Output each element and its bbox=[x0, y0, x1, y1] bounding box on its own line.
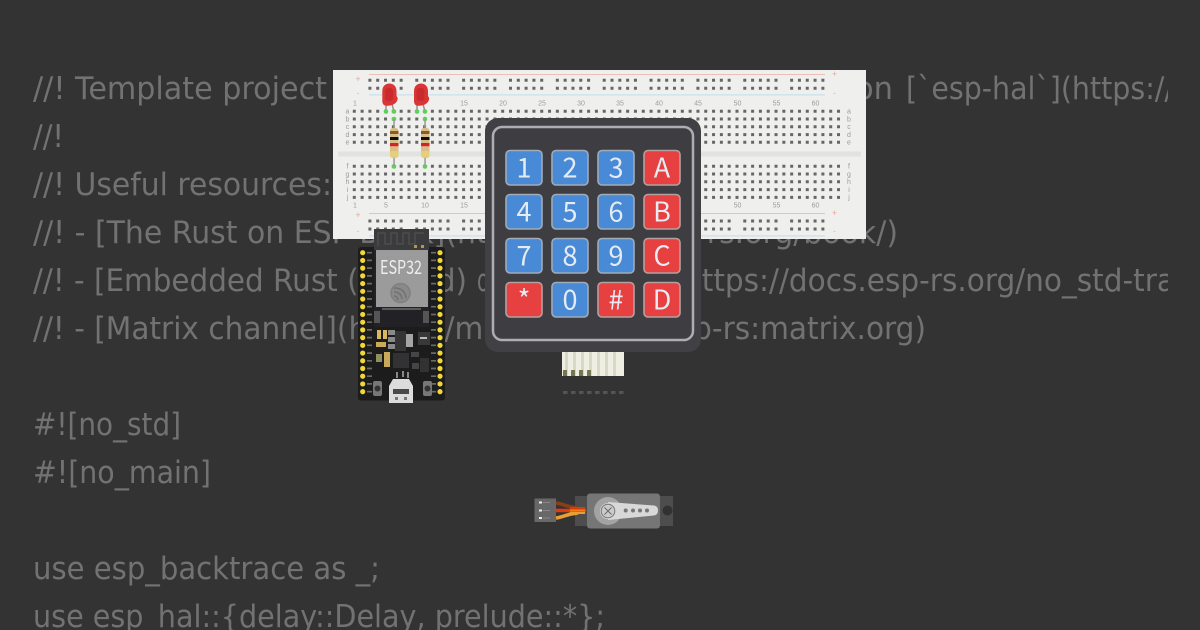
breadboard column numbers: 45 bbox=[694, 100, 702, 108]
ESP32 dev board bbox=[358, 229, 445, 403]
key row 3 bbox=[506, 234, 680, 274]
red LED and resistor 1 bbox=[382, 84, 398, 169]
code line: embedded Rust training: on bbox=[477, 263, 502, 299]
breadboard rail plus and minus marks: + bbox=[355, 74, 361, 84]
code line: Rust on ESP book: //! - [The Rust on ESP Book](https://docs.esp-rs.org/book/) bbox=[33, 215, 898, 251]
reset and boot buttons bbox=[373, 381, 432, 396]
breadboard column numbers: b bbox=[847, 116, 851, 124]
key row 1: 2 bbox=[562, 146, 578, 186]
breadboard column numbers: 55 bbox=[773, 100, 780, 108]
code line: template project: on bbox=[855, 71, 893, 107]
header pins bbox=[363, 253, 440, 394]
breadboard column numbers: c bbox=[346, 124, 350, 131]
code line: template project: [`esp-hal`](https:// bbox=[906, 71, 1174, 107]
breadboard column numbers: 15 bbox=[460, 100, 468, 108]
board components bbox=[376, 330, 430, 378]
code line: embedded Rust training bbox=[33, 268, 1168, 298]
key row 2 bbox=[506, 190, 680, 230]
servo motor bbox=[534, 494, 673, 528]
code line: template project: //! Template project bbox=[33, 71, 327, 107]
key row 3: 7 bbox=[516, 234, 532, 274]
key row 2: 5 bbox=[562, 190, 578, 230]
red LED and resistor 2 bbox=[414, 84, 430, 169]
breadboard rail plus and minus marks: + bbox=[832, 69, 837, 79]
breadboard column numbers: a bbox=[847, 108, 851, 116]
servo connector bbox=[534, 498, 556, 522]
breadboard column numbers: j bbox=[346, 194, 349, 202]
code line: template project bbox=[33, 74, 1168, 106]
breadboard column numbers: 20 bbox=[499, 100, 507, 108]
breadboard column numbers: i bbox=[848, 187, 850, 194]
key row 4: * bbox=[518, 278, 530, 318]
breadboard rail plus and minus marks: - bbox=[356, 226, 360, 236]
breadboard column numbers: b bbox=[346, 116, 350, 124]
breadboard column numbers: h bbox=[847, 179, 851, 186]
4x4 membrane keypad bbox=[485, 118, 701, 394]
servo horn bbox=[594, 497, 658, 525]
breadboard column numbers: a bbox=[346, 108, 350, 116]
servo body and mounting tabs bbox=[575, 494, 673, 528]
breadboard column numbers: 60 bbox=[812, 100, 819, 108]
code line: embedded Rust training: //! - [Embedded Rust (no_std) bbox=[33, 263, 467, 299]
servo wires bbox=[556, 503, 586, 518]
code line: comment marker: //! bbox=[33, 119, 64, 155]
breadboard column numbers: 1 bbox=[353, 100, 357, 108]
breadboard column numbers: 1 bbox=[353, 202, 357, 210]
keypad header pins bbox=[563, 391, 624, 394]
breadboard column numbers: 50 bbox=[734, 100, 741, 108]
icon: Espressif logo bbox=[391, 284, 410, 302]
breadboard column numbers: e bbox=[847, 140, 851, 146]
breadboard column numbers: f bbox=[347, 164, 349, 170]
key row 4: # bbox=[608, 278, 624, 318]
breadboard column numbers: d bbox=[847, 132, 851, 139]
breadboard column numbers bbox=[346, 100, 851, 210]
key row 1: A bbox=[654, 146, 671, 186]
breadboard column numbers: 40 bbox=[655, 100, 663, 108]
code line: no_main attribute: #![no_main] bbox=[33, 455, 211, 491]
breadboard column numbers: h bbox=[346, 179, 350, 186]
breadboard rail plus and minus marks: - bbox=[833, 88, 836, 98]
code line: no_std attribute: #![no_std] bbox=[33, 407, 181, 443]
breadboard column numbers: g bbox=[847, 172, 851, 178]
key row 4: 0 bbox=[562, 278, 578, 318]
code line: embedded Rust training: https://docs.esp-rs.org/no_std-tra bbox=[683, 263, 1175, 299]
key row 2: 4 bbox=[516, 190, 532, 230]
breadboard column numbers: 25 bbox=[538, 100, 546, 108]
breadboard rail plus and minus marks: + bbox=[355, 210, 361, 220]
key row 3: C bbox=[653, 234, 671, 274]
breadboard rail plus and minus marks: - bbox=[833, 226, 836, 236]
code line: matrix channel: //! - [Matrix channel](https://matrix.to/#/#esp-rs:matrix.org) bbox=[33, 311, 926, 347]
breadboard column numbers: 30 bbox=[577, 100, 585, 108]
key row 1 bbox=[506, 146, 680, 186]
breadboard rail plus and minus marks: + bbox=[832, 208, 837, 218]
breadboard column numbers: 60 bbox=[812, 202, 819, 210]
breadboard column numbers: 50 bbox=[734, 202, 741, 210]
breadboard column numbers: 5 bbox=[384, 202, 388, 210]
code line: useful resources: //! Useful resources: bbox=[33, 167, 332, 203]
key row 3: 8 bbox=[562, 234, 578, 274]
breadboard rail plus and minus marks: - bbox=[356, 88, 360, 98]
breadboard bbox=[333, 69, 866, 239]
breadboard column numbers: c bbox=[847, 124, 851, 131]
breadboard rail plus and minus marks bbox=[355, 69, 837, 236]
key row 2: B bbox=[653, 190, 671, 230]
breadboard column numbers: f bbox=[848, 164, 850, 170]
ESP32 label: ESP32 bbox=[380, 253, 422, 280]
breadboard column numbers: g bbox=[346, 172, 350, 178]
breadboard column numbers: d bbox=[346, 132, 350, 139]
key row 4 bbox=[506, 278, 680, 318]
key row 2: 6 bbox=[608, 190, 624, 230]
key row 1: 3 bbox=[608, 146, 624, 186]
key row 4: D bbox=[653, 278, 671, 318]
breadboard column numbers: i bbox=[347, 187, 349, 194]
micro USB connector bbox=[389, 379, 413, 403]
breadboard column numbers: 15 bbox=[460, 202, 468, 210]
breadboard column numbers: 10 bbox=[421, 202, 429, 210]
breadboard column numbers: 35 bbox=[616, 100, 624, 108]
breadboard column numbers: 55 bbox=[773, 202, 780, 210]
code line: use esp_backtrace: use esp_backtrace as _; bbox=[33, 551, 380, 587]
key row 1: 1 bbox=[516, 146, 532, 186]
key row 3: 9 bbox=[608, 234, 624, 274]
keypad ribbon cable bbox=[562, 352, 624, 376]
breadboard column numbers: j bbox=[847, 194, 850, 202]
breadboard column numbers: e bbox=[346, 140, 350, 146]
ESP32 module bbox=[374, 229, 429, 327]
